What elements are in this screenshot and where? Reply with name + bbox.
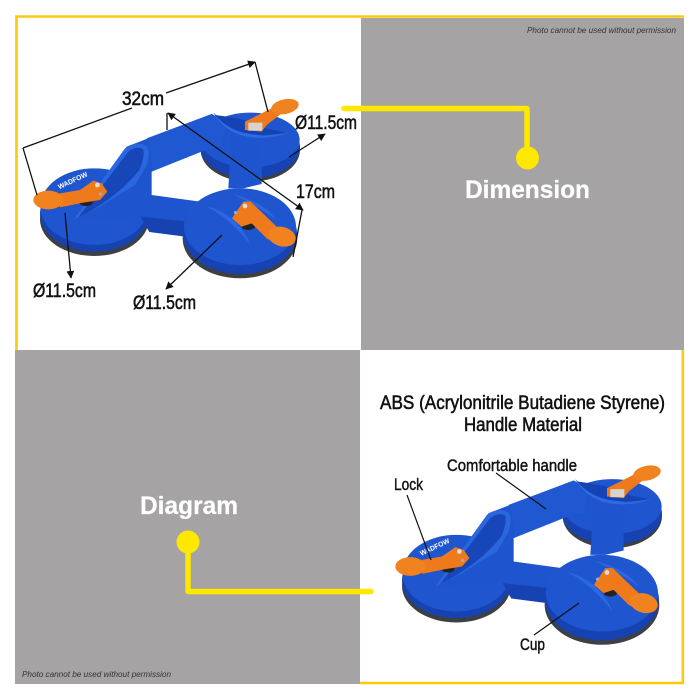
text block: material title: [380, 393, 665, 436]
arrow: front cup diameter: [166, 235, 222, 289]
arrow: 32cm length: [23, 62, 255, 148]
callout: comfortable handle: Comfortable handle: [447, 456, 577, 475]
text block: material title: ABS (Acrylonitrile Butadiene Styrene): [380, 393, 665, 414]
bracket: 32cm left end: [23, 148, 37, 195]
text block: material title: Handle Material: [464, 415, 582, 436]
bracket: 17cm top end: [166, 113, 168, 130]
label: 17cm: 17cm: [296, 182, 335, 203]
connector: diagram: [176, 530, 371, 592]
product image: dimension tool: WADFOW: [57, 171, 89, 191]
panel: grey dimension panel: [361, 18, 684, 350]
arrow: left cup diameter: [65, 213, 71, 278]
heading: Dimension: Dimension: [465, 176, 590, 204]
bracket: 17cm bottom end: [293, 210, 302, 257]
callouts: [394, 456, 579, 654]
callout: lock: Lock: [394, 475, 423, 494]
panel: grey diagram panel: [15, 350, 360, 684]
label: back cup diameter: Ø11.5cm: [295, 113, 357, 134]
bracket: 32cm right end: [255, 62, 268, 112]
product image: diagram tool: WADFOW: [419, 538, 451, 558]
label: left cup diameter: Ø11.5cm: [33, 281, 96, 302]
leader: comfortable handle: [496, 473, 546, 509]
arrow: 17cm width: [168, 113, 303, 210]
connector: dimension: [344, 108, 539, 170]
label: front cup diameter: Ø11.5cm: [133, 293, 196, 314]
leader: cup: [534, 603, 579, 635]
label: 32cm: 32cm: [122, 89, 164, 110]
product image: dimension tool: [33, 97, 300, 278]
callout: cup: Cup: [520, 635, 545, 654]
dimension lines and labels: [23, 62, 357, 314]
heading: Diagram: Diagram: [140, 492, 238, 520]
note: top permission notice: Photo cannot be used without permission: [527, 25, 676, 35]
leader: lock: [407, 495, 431, 560]
product image: diagram tool: [395, 463, 662, 645]
arrow: back cup diameter: [289, 134, 325, 157]
note: bottom permission notice: Photo cannot be used without permission: [22, 669, 171, 679]
